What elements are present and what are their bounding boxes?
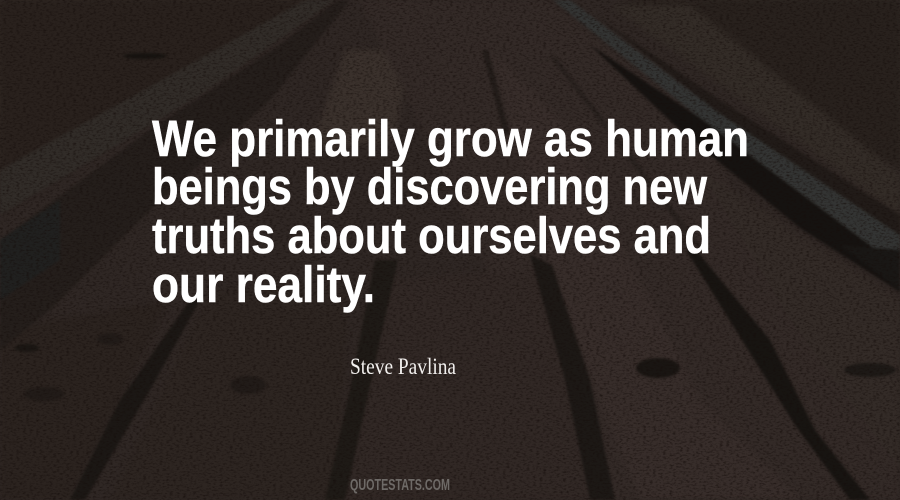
quote text: our reality. (152, 256, 375, 313)
left rail (0, 0, 335, 215)
quote text: truths about ourselves and (152, 207, 711, 264)
watermark: site name: QUOTESTATS.COM (350, 477, 450, 494)
author name: Steve Pavlina (350, 354, 456, 379)
quote text: beings by discovering new (152, 158, 707, 215)
quote text: We primarily grow as human (152, 110, 749, 167)
plank gaps (686, 250, 870, 500)
quote text (152, 110, 749, 313)
right rail (553, 0, 900, 268)
knots (636, 358, 680, 378)
